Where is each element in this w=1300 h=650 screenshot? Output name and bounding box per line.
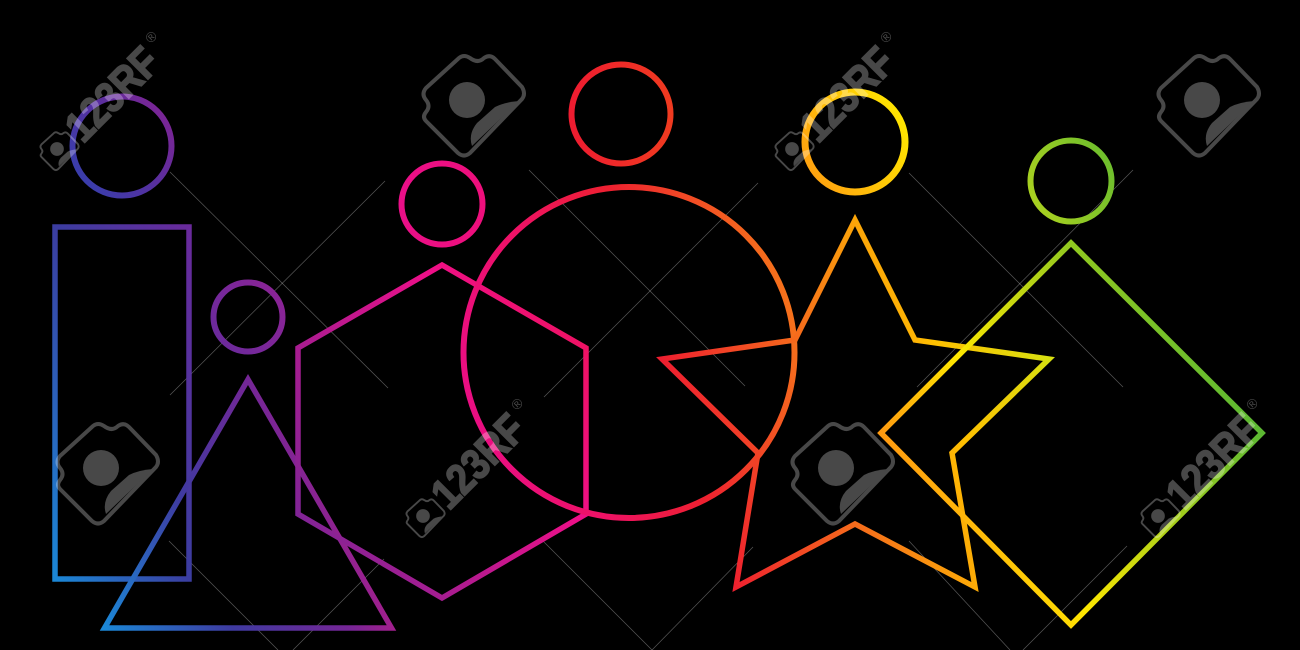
- figure 2: head circle: [214, 282, 282, 352]
- watermark: 123RF logo, upper centre: 123RF: [791, 38, 904, 151]
- figure 2: triangle body: [104, 380, 392, 628]
- watermark: 123RF logo, lower centre: 123RF: [422, 405, 535, 518]
- figure 1: head circle: [72, 96, 172, 196]
- figure 4: large circle body: [464, 187, 794, 518]
- figure 1: rectangle body: [55, 227, 189, 579]
- watermark: large egg icon, lower left: [58, 424, 158, 524]
- watermark: 123RF logo, upper centre: ®: [877, 27, 896, 46]
- figure 6: head circle: [1030, 140, 1112, 222]
- watermark: 123RF logo, lower right: ®: [1243, 394, 1262, 413]
- figure 3: hexagon body: [298, 265, 586, 598]
- watermark: 123RF logo, lower centre: ®: [508, 394, 527, 413]
- figure 3: head circle: [402, 164, 482, 244]
- watermark: 123RF logo, lower right: 123RF: [1157, 405, 1270, 518]
- thin diagonal guide lines: [169, 170, 1133, 650]
- watermark: large egg icon, upper right: [1158, 56, 1259, 156]
- watermark: 123RF logo, upper left: ®: [142, 27, 161, 46]
- figure 6: diamond body: [881, 243, 1262, 625]
- watermark: large egg icon, upper centre: [424, 56, 524, 156]
- figure 5: head circle: [805, 92, 905, 192]
- figure 4: head circle: [572, 64, 670, 164]
- watermark: 123RF logo, upper left: 123RF: [56, 38, 169, 151]
- watermark: large egg icon, lower centre: [792, 424, 893, 524]
- figure 5: star body: [662, 220, 1049, 587]
